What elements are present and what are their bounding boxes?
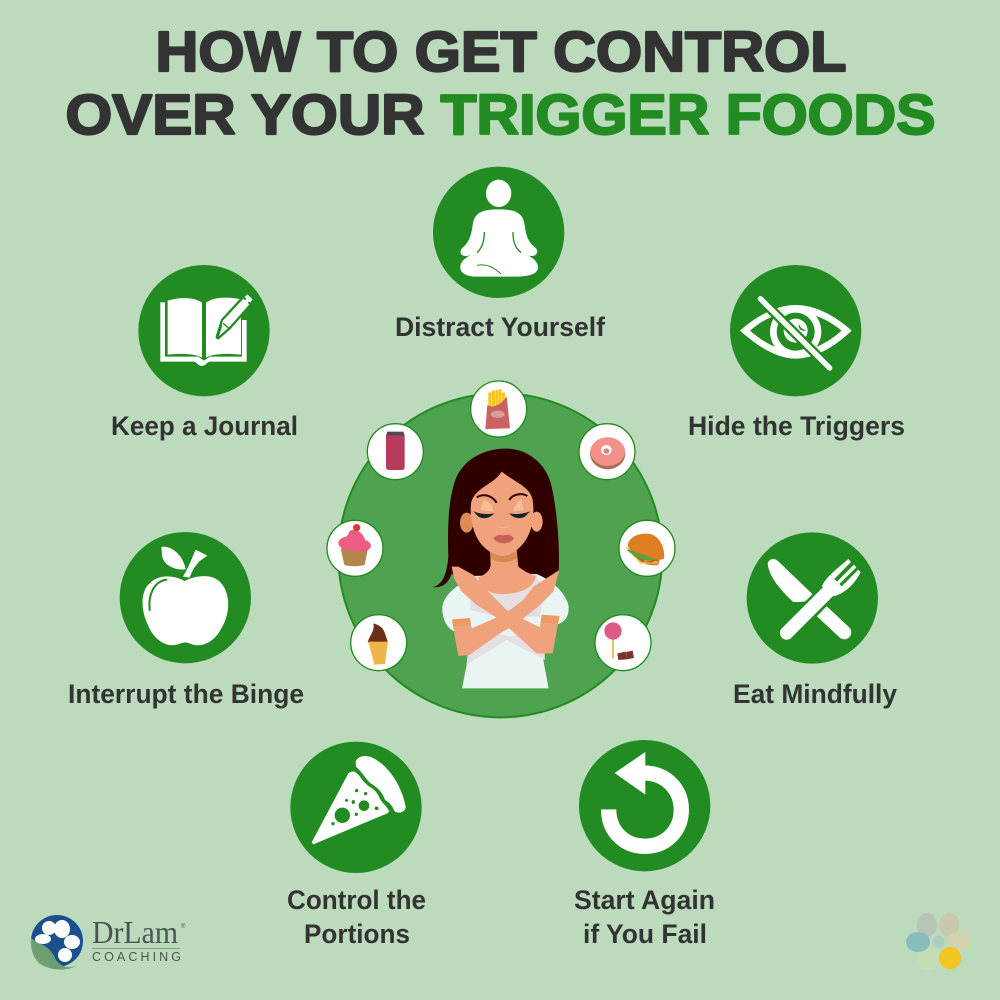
- logo: DrLam Coaching: DrLam: [92, 914, 178, 950]
- food: ice cream: [351, 615, 407, 671]
- food: soda can: [367, 424, 423, 480]
- large green circle: [338, 393, 662, 717]
- central illustration: [327, 381, 675, 717]
- woman: [433, 449, 569, 688]
- label: Start Again if You Fail: if You Fail: [583, 919, 707, 949]
- label: Control the Portions: [287, 885, 426, 949]
- food: donut: [579, 424, 635, 480]
- label: Distract Yourself: Distract Yourself: [395, 312, 606, 342]
- title: OVER YOUR: [66, 83, 424, 147]
- label: Start Again if You Fail: Start Again: [574, 885, 715, 915]
- logo: DrLam Coaching: COACHING: [92, 950, 181, 964]
- title: [66, 20, 936, 147]
- icon: knife and fork: [747, 532, 878, 664]
- logo: DrLam Coaching: ®: [181, 923, 186, 930]
- title: TRIGGER FOODS: [440, 83, 936, 147]
- label: Eat Mindfully: Eat Mindfully: [733, 679, 897, 709]
- icon: pizza slice: [290, 742, 422, 873]
- food: fries: [471, 381, 527, 437]
- crossed arms: [452, 570, 559, 656]
- title: HOW TO GET CONTROL: [156, 20, 846, 84]
- label: Hide the Triggers: Hide the Triggers: [688, 411, 905, 441]
- food: burger: [619, 520, 675, 576]
- icon: apple: [120, 532, 251, 663]
- icon: meditation: [433, 167, 564, 298]
- label: Control the Portions: Portions: [304, 919, 410, 949]
- label: Start Again if You Fail: [574, 885, 715, 949]
- label: Control the Portions: Control the: [287, 885, 426, 915]
- icon: journal: [138, 265, 270, 396]
- food: lollipop and chocolates: [595, 615, 651, 671]
- logo: DrLam Coaching: [31, 914, 186, 970]
- icon: restart arrow: [579, 740, 710, 871]
- label: Interrupt the Binge: Interrupt the Binge: [68, 679, 304, 709]
- logo: flower watermark: [906, 913, 971, 970]
- food: cupcake: [327, 520, 383, 576]
- label: Keep a Journal: Keep a Journal: [111, 411, 298, 441]
- icon: crossed-out eye: [730, 265, 861, 396]
